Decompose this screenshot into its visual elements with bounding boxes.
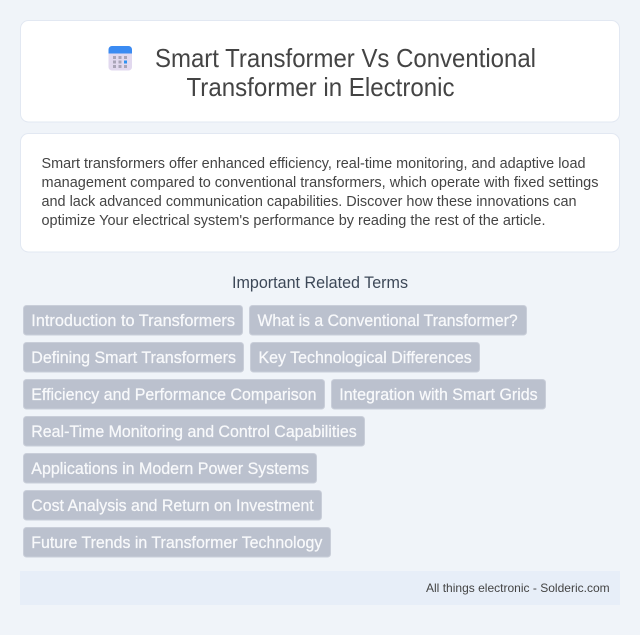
related terms chips [24, 306, 546, 557]
chip: efficiency [24, 380, 324, 409]
heading: important related terms: Important Related Terms [232, 274, 408, 292]
title: Transformer in Electronic [186, 72, 454, 102]
chip: introduction: Introduction to Transformers [31, 312, 235, 330]
intro text [42, 156, 598, 229]
chip: defining [24, 342, 244, 372]
chip: monitoring: Real-Time Monitoring and Control Capabilities [31, 423, 357, 441]
intro text: Smart transformers offer enhanced efficiency, real-time monitoring, and adaptive load [42, 156, 586, 172]
chip: monitoring [24, 416, 364, 446]
chip: efficiency: Efficiency and Performance Comparison [31, 386, 317, 404]
chip: smart grids: Integration with Smart Grids [339, 386, 538, 404]
chip: defining: Defining Smart Transformers [31, 349, 236, 367]
title [155, 43, 536, 102]
icon: calendar [108, 46, 132, 70]
chip: conventional: What is a Conventional Transformer? [258, 312, 518, 330]
chip: applications [24, 454, 316, 483]
chip: cost: Cost Analysis and Return on Investment [31, 497, 314, 515]
chip: applications: Applications in Modern Power Systems [31, 460, 309, 478]
intro text: and lack advanced communication capabilities. Discover how these innovations can [42, 194, 576, 210]
chip: differences [250, 342, 480, 372]
chip: future [24, 528, 330, 557]
footer: All things electronic - Solderic.com [426, 581, 610, 595]
chip: cost [24, 490, 322, 520]
chip: smart grids [332, 380, 546, 409]
panel: title card [20, 20, 620, 122]
intro text: management compared to conventional transformers, which operate with fixed settings [42, 175, 598, 191]
chip: introduction [24, 306, 242, 335]
chip: differences: Key Technological Differences [258, 349, 472, 367]
chip: conventional [250, 306, 526, 335]
panel: intro paragraph [20, 134, 620, 252]
intro text: optimize Your electrical system's performance by reading the rest of the article. [42, 213, 546, 229]
chip: future: Future Trends in Transformer Technology [31, 534, 323, 552]
title: Smart Transformer Vs Conventional [155, 43, 536, 73]
footer [20, 571, 620, 605]
